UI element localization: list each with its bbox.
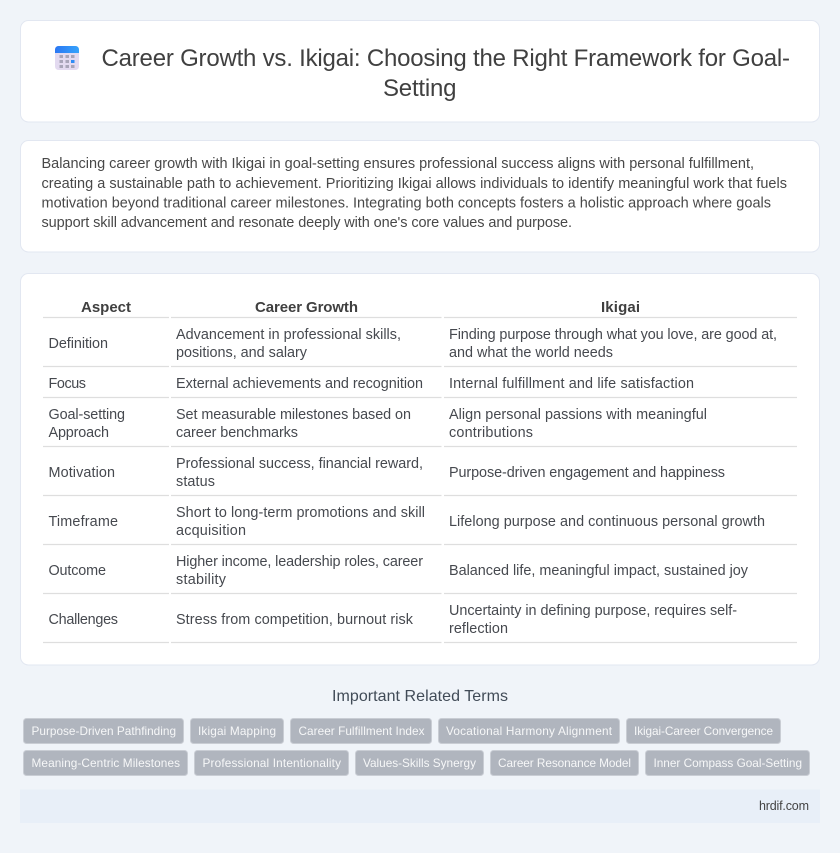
row: definition: Definition <box>48 336 108 352</box>
tag: Career Resonance Model <box>498 756 631 770</box>
row: motivation: Professional success, financial reward, <box>176 456 423 472</box>
tag <box>490 750 638 776</box>
tag: Career Fulfillment Index <box>298 724 425 738</box>
row: definition: Advancement in professional skills, <box>176 327 401 343</box>
tag <box>24 718 184 744</box>
row: outcome: Higher income, leadership roles, career <box>176 554 423 570</box>
tag: Meaning-Centric Milestones <box>32 756 180 770</box>
panel: introduction text: motivation beyond traditional career milestones. Integrating both concepts fosters a holistic approach where goals <box>42 196 771 212</box>
tag list <box>24 718 810 776</box>
row: focus: Focus <box>48 376 86 392</box>
row: goal-setting approach: Approach <box>48 425 109 441</box>
row: challenges <box>48 603 737 637</box>
row: timeframe: acquisition <box>176 523 246 539</box>
tag: Vocational Harmony Alignment <box>446 724 613 738</box>
row: motivation: status <box>176 474 215 490</box>
row: outcome <box>48 554 749 588</box>
row: timeframe: Short to long-term promotions and skill <box>176 505 425 521</box>
panel: header <box>20 20 820 122</box>
panel: introduction text: Balancing career growth with Ikigai in goal-setting ensures professional success aligns with personal fulfillment, <box>42 156 754 172</box>
row: goal-setting approach <box>48 407 707 441</box>
heading: important related terms: Important Related Terms <box>332 688 508 705</box>
row: motivation: Motivation <box>48 465 115 481</box>
panel: introduction text <box>20 140 820 252</box>
row: challenges: reflection <box>449 621 508 637</box>
row: focus: Internal fulfillment and life satisfaction <box>449 376 694 392</box>
row: timeframe <box>48 505 765 539</box>
title <box>102 45 790 102</box>
row: motivation: Purpose-driven engagement and happiness <box>449 465 725 481</box>
row: challenges: Uncertainty in defining purpose, requires self- <box>449 603 737 619</box>
tag: Inner Compass Goal-Setting <box>654 756 802 770</box>
footer <box>20 790 820 823</box>
panel: introduction text: support skill advancement and resonate deeply with one's core values and purpose. <box>42 215 572 231</box>
tag: Professional Intentionality <box>202 756 341 770</box>
row: challenges: Stress from competition, burnout risk <box>176 612 414 628</box>
tag: Ikigai-Career Convergence <box>634 724 773 738</box>
tag <box>290 718 432 744</box>
table header row <box>81 299 640 316</box>
tag <box>190 718 284 744</box>
tag <box>438 718 620 744</box>
row: goal-setting approach: contributions <box>449 425 533 441</box>
tag: Ikigai Mapping <box>198 724 276 738</box>
tag <box>626 718 780 744</box>
row: goal-setting approach: career benchmarks <box>176 425 298 441</box>
table header row: Aspect <box>81 299 131 316</box>
title: Setting <box>383 75 456 102</box>
row: definition <box>48 327 777 361</box>
table header row: Ikigai <box>601 299 640 316</box>
tag <box>356 750 484 776</box>
table header row: Career Growth <box>255 299 358 316</box>
row: focus <box>48 376 694 392</box>
row: challenges: Challenges <box>48 612 118 628</box>
row: goal-setting approach: Goal-setting <box>48 407 125 423</box>
panel: comparison table <box>20 274 820 665</box>
row: definition: positions, and salary <box>176 345 308 361</box>
tag <box>24 750 188 776</box>
row: focus: External achievements and recognition <box>176 376 423 392</box>
table row lines <box>43 318 797 642</box>
title: Career Growth vs. Ikigai: Choosing the Right Framework for Goal- <box>102 45 790 72</box>
row: timeframe: Timeframe <box>48 514 118 530</box>
row: goal-setting approach: Set measurable milestones based on <box>176 407 411 423</box>
row: definition: and what the world needs <box>449 345 613 361</box>
row: timeframe: Lifelong purpose and continuous personal growth <box>449 514 765 530</box>
tag: Values-Skills Synergy <box>363 756 476 770</box>
footer: hrdif.com <box>759 799 809 813</box>
panel: introduction text: creating a sustainable path to achievement. Prioritizing Ikigai allows individuals to identify meaningful work that fuels <box>42 176 787 192</box>
row: outcome: stability <box>176 572 227 588</box>
tag: Purpose-Driven Pathfinding <box>32 724 176 738</box>
row: outcome: Balanced life, meaningful impact, sustained joy <box>449 563 749 579</box>
tag <box>194 750 348 776</box>
row: definition: Finding purpose through what you love, are good at, <box>449 327 777 343</box>
icon: calendar <box>55 46 79 70</box>
tag <box>646 750 810 776</box>
row: goal-setting approach: Align personal passions with meaningful <box>449 407 707 423</box>
row: outcome: Outcome <box>48 563 106 579</box>
row: motivation <box>48 456 725 490</box>
